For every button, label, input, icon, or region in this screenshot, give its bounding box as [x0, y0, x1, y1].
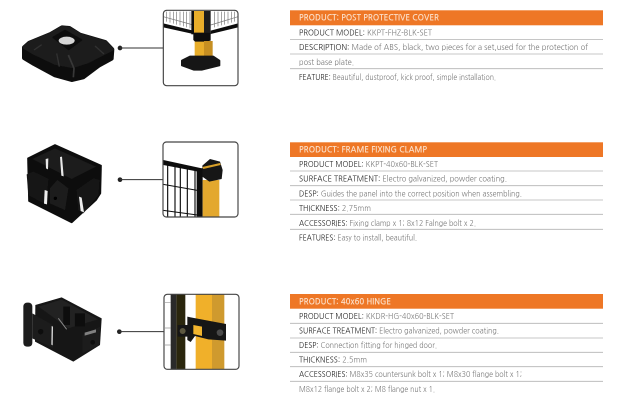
spec table: frame fixing clamp: FEATURES: Easy to install, beautiful.	[299, 233, 417, 242]
spec table: frame fixing clamp	[290, 160, 603, 242]
header bar: frame fixing clamp	[290, 142, 603, 157]
header bar: 40x60 hinge: PRODUCT: 40x60 HINGE	[299, 297, 391, 306]
spec table: post protective cover: post base plate.	[299, 58, 354, 67]
spec table: 40x60 hinge: ACCESSORIES: M8x35 countersunk bolt x 1; M8x30 flange bolt x 1;	[299, 370, 522, 379]
spec table: 40x60 hinge: DESP: Connection fitting for hinged door.	[299, 341, 437, 350]
inset photo: cover installed on post	[163, 10, 238, 86]
spec table: post protective cover: DESCRIPTION: Made of ABS, black, two pieces for a set,used for the protection of	[299, 43, 588, 52]
spec table: frame fixing clamp: DESP: Guides the panel into the correct position when assembling.	[299, 190, 522, 198]
icon group: post protective cover	[24, 10, 238, 86]
spec table: 40x60 hinge: SURFACE TREATMENT: Electro galvanized, powder coating.	[299, 326, 499, 336]
connector: hinge to inset	[117, 329, 164, 334]
icon group: 40x60 hinge	[23, 294, 239, 369]
spec table: frame fixing clamp: SURFACE TREATMENT: Electro galvanized, powder coating.	[299, 175, 507, 184]
spec table: 40x60 hinge: M8x12 flange bolt x 2; M8 flange nut x 1.	[299, 385, 435, 394]
header bar: frame fixing clamp: PRODUCT: FRAME FIXING CLAMP	[299, 146, 427, 155]
spec table: post protective cover: FEATURE: Beautiful, dustproof, kick proof, simple installation.	[299, 73, 496, 82]
spec table: 40x60 hinge	[290, 312, 603, 394]
spec table: frame fixing clamp: THICKNESS: 2.75mm	[299, 204, 371, 213]
icon group: frame fixing clamp	[27, 142, 238, 222]
icon: frame fixing clamp product	[27, 145, 101, 222]
inset photo: clamp installed on frame	[163, 142, 238, 217]
spec table: frame fixing clamp: PRODUCT MODEL: KKPT-40x60-BLK-SET	[299, 160, 438, 169]
connector: cover to inset	[118, 46, 163, 50]
spec table: 40x60 hinge: PRODUCT MODEL: KKDR-HG-40x60-BLK-SET	[299, 312, 454, 321]
spec table: post protective cover	[290, 28, 603, 82]
header bar: 40x60 hinge	[290, 294, 603, 309]
connector: clamp to inset	[118, 177, 163, 182]
spec table: 40x60 hinge: THICKNESS: 2.5mm	[299, 356, 367, 364]
header bar: post protective cover	[290, 10, 603, 25]
header bar: post protective cover: PRODUCT: POST PROTECTIVE COVER	[299, 14, 440, 23]
icon: hinge product	[23, 297, 102, 362]
inset photo: hinge installed on post	[164, 294, 239, 369]
spec table: post protective cover: PRODUCT MODEL: KKPT-FHZ-BLK-SET	[299, 28, 432, 37]
icon: post protective cover product	[24, 27, 112, 80]
spec table: frame fixing clamp: ACCESSORIES: Fixing clamp x 1; 8x12 Falnge bolt x 2.	[299, 219, 476, 228]
